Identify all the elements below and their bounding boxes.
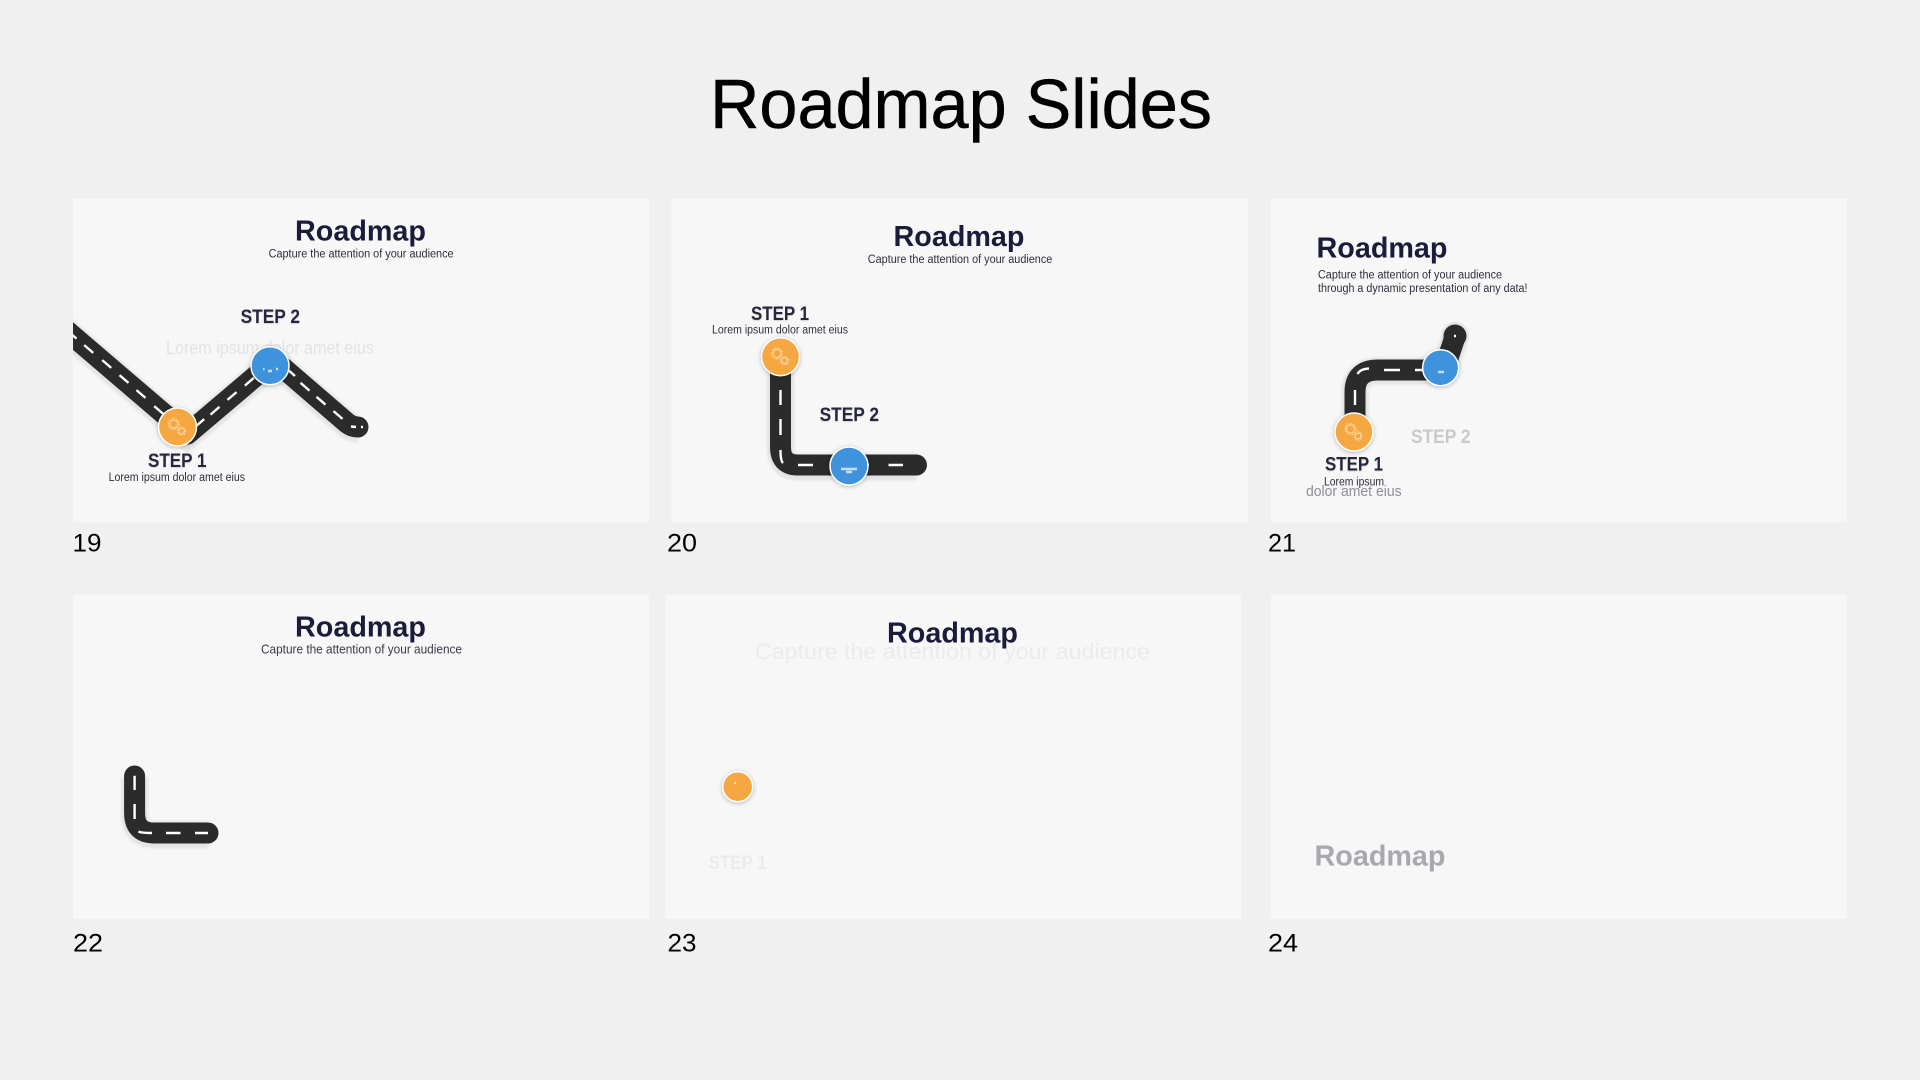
panel: slide 19 xyxy=(73,220,454,484)
subtitle: slide 19: Capture the attention of your audience xyxy=(269,248,454,260)
heading: slide 23: Roadmap xyxy=(887,618,1018,650)
road: bend xyxy=(1355,322,1469,433)
road: zigzag xyxy=(60,325,363,436)
subtitle: slide 21: through a dynamic presentation of any data! xyxy=(1318,283,1528,295)
heading: slide 19: Roadmap xyxy=(295,216,426,248)
subtitle: slide 22: Capture the attention of your audience xyxy=(261,643,462,657)
slide number 20: 20 xyxy=(667,530,697,558)
heading: slide 20: Roadmap xyxy=(894,221,1024,253)
icon: gears xyxy=(168,419,186,435)
panel: slide 20 xyxy=(672,199,1248,522)
panel: slide 21 xyxy=(1271,199,1847,522)
panel: slide 24 xyxy=(1271,595,1847,919)
fading subtitle: slide 23: Capture the attention of your audience xyxy=(755,639,1150,664)
marker: step 1 xyxy=(158,408,196,446)
panel: slide 22 xyxy=(73,595,649,919)
road: L shape xyxy=(780,357,916,467)
icon: gears xyxy=(1345,424,1362,440)
fading label: step 1: STEP 1 xyxy=(709,853,767,874)
title: Roadmap Slides xyxy=(710,65,1212,143)
label: step 1: Lorem ipsum dolor amet eius xyxy=(109,472,245,484)
heading: slide 22: Roadmap xyxy=(295,612,426,644)
slide number 19: 19 xyxy=(72,530,102,558)
icon: gears xyxy=(772,348,789,365)
label: step 2: STEP 2 xyxy=(820,405,879,426)
marker: step 1 xyxy=(1335,413,1373,451)
label: step 1: STEP 1 xyxy=(751,304,809,325)
label: step 1 xyxy=(109,451,245,484)
subtitle: slide 20: Capture the attention of your audience xyxy=(868,254,1052,266)
label: step 1: Lorem ipsum xyxy=(1324,477,1384,489)
panel: slide 23 xyxy=(665,595,1241,919)
fading step 2 description: Lorem ipsum dolor amet eius xyxy=(166,338,374,358)
marker: step 1 xyxy=(723,772,753,802)
label: step 1: dolor amet eius xyxy=(1306,484,1402,500)
label: step 1: STEP 1 xyxy=(148,451,207,472)
slide number 24: 24 xyxy=(1268,930,1298,958)
marker: step 2 xyxy=(251,347,289,385)
subtitle: slide 21: Capture the attention of your audience xyxy=(1318,270,1502,282)
marker: step 1 xyxy=(762,338,800,376)
subtitle: slide 21 xyxy=(1318,270,1528,295)
label: step 1 xyxy=(712,304,848,336)
marker: step 2 xyxy=(830,447,868,485)
road: L shape xyxy=(135,776,208,834)
label: step 1 xyxy=(1306,455,1402,500)
slide number 22: 22 xyxy=(73,930,103,958)
label: step 1: Lorem ipsum dolor amet eius xyxy=(712,324,848,336)
marker: step 2 xyxy=(1423,350,1459,386)
heading: slide 21: Roadmap xyxy=(1316,233,1448,265)
label: step 1: STEP 1 xyxy=(1325,455,1383,476)
label: step 2: STEP 2 xyxy=(241,307,300,328)
fading label: step 2: STEP 2 xyxy=(1411,427,1470,448)
slide number 21: 21 xyxy=(1268,530,1296,558)
slide number 23: 23 xyxy=(668,930,696,958)
fading heading: slide 24: Roadmap xyxy=(1314,841,1446,873)
